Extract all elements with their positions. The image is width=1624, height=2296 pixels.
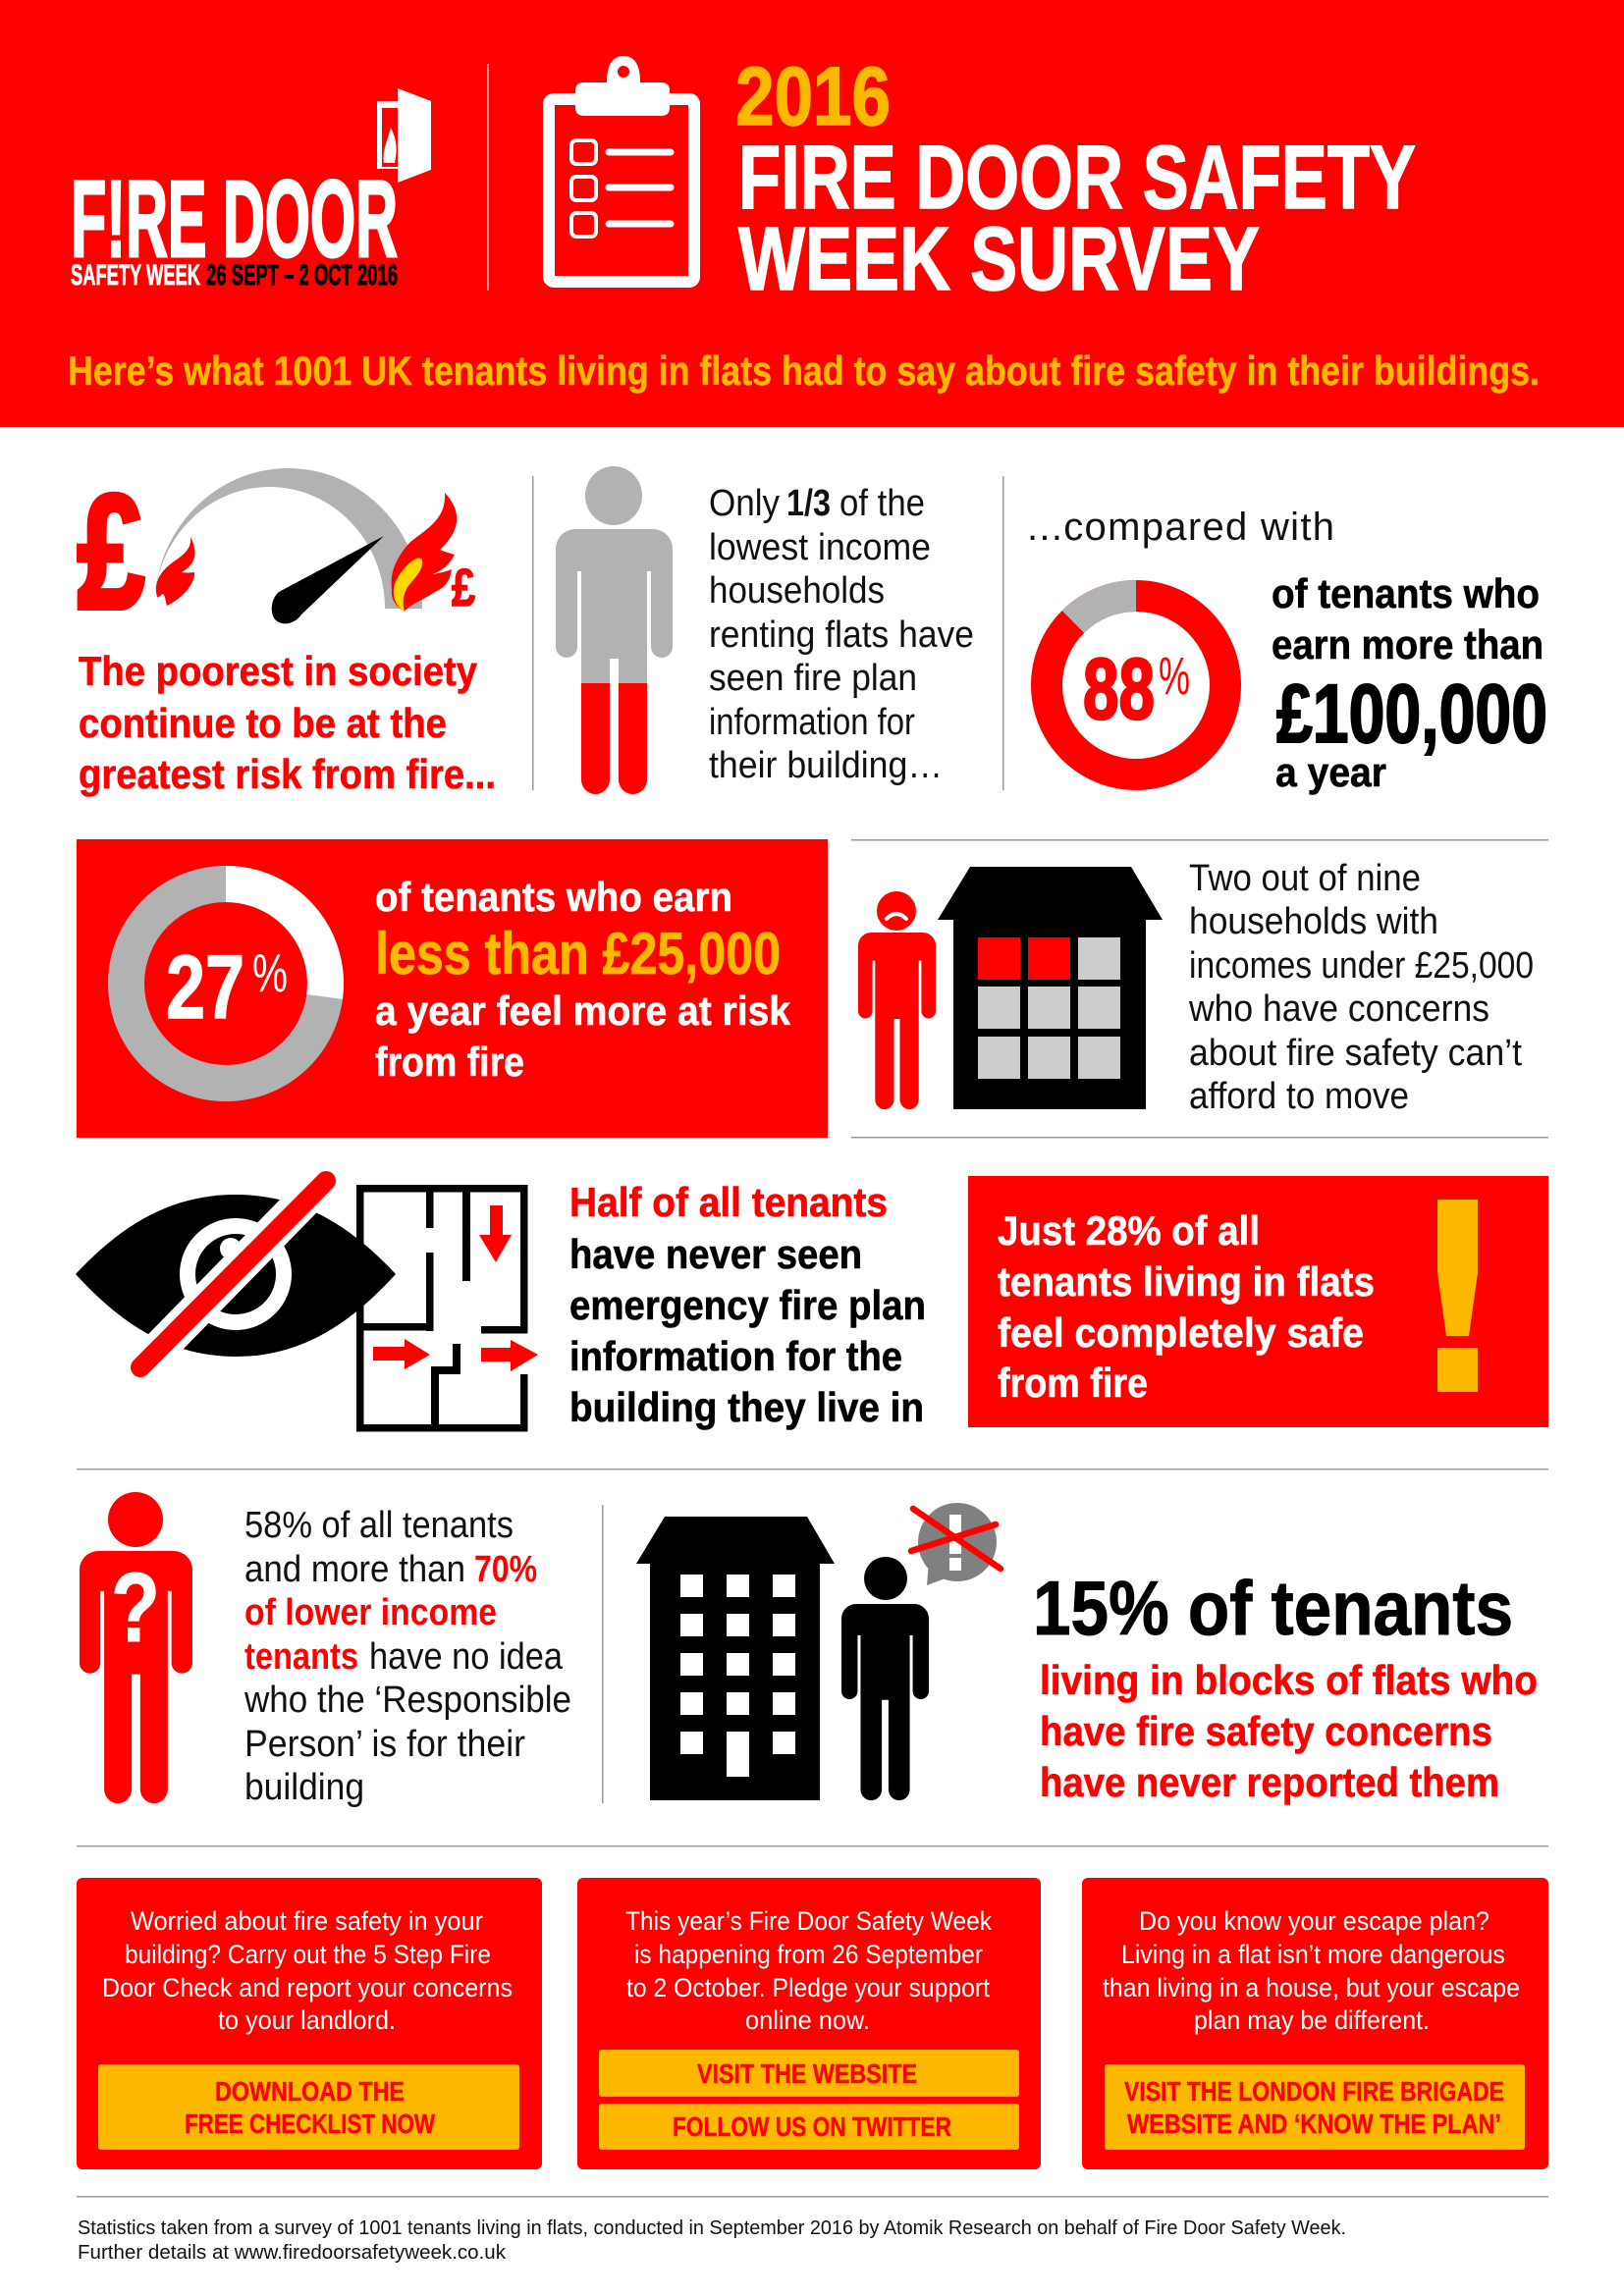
text: earners under 25,000 — [375, 874, 791, 1085]
footer: source note: Further details at www.firedoorsafetyweek.co.uk — [78, 2242, 507, 2264]
icon: fire door — [377, 88, 431, 183]
icon: crossed out eye — [76, 1181, 396, 1367]
button: London Fire Brigade: VISIT THE LONDON FIRE BRIGADE — [1124, 2076, 1504, 2107]
text: blocks of flats: have fire safety concerns — [1040, 1708, 1492, 1754]
icon: gauge arc — [154, 468, 422, 609]
icon: tower block — [636, 1517, 835, 1800]
panel: 28 percent feel safe — [968, 1176, 1548, 1427]
text: earners under 25,000: less than £25,000 — [375, 921, 781, 987]
icon: apartment block with windows — [938, 867, 1163, 1109]
text: one third of households: information for — [709, 702, 915, 743]
text: one third of households: seen fire plan — [709, 658, 917, 699]
text: half of all tenants: have never seen — [569, 1231, 862, 1277]
icon: gauge needle — [272, 536, 384, 623]
text: this year's week: to 2 October. Pledge your support — [626, 1973, 990, 2002]
panel: 88 percent comparison — [1027, 506, 1547, 795]
panel: escape plan call to action — [1082, 1878, 1548, 2169]
panel: website call to action — [577, 1878, 1041, 2169]
icon: black person — [841, 1557, 929, 1800]
text: 58 percent of tenants: building — [244, 1767, 364, 1808]
text: just 28 percent: tenants living in flats — [998, 1258, 1375, 1305]
text: 58 percent of tenants — [244, 1505, 571, 1808]
text: 58 percent of tenants: Person’ is for their — [244, 1724, 525, 1765]
button: visit the website — [599, 2050, 1019, 2097]
text: one third of households: 1/3 — [786, 483, 831, 524]
text: worried about fire safety: Worried about fire safety in your — [131, 1906, 483, 1936]
text: just 28 percent: from fire — [998, 1360, 1148, 1406]
text: two out of nine — [1188, 858, 1534, 1117]
text: 58 percent of tenants: of lower income — [244, 1592, 497, 1633]
text: this year's week: online now. — [745, 2005, 870, 2035]
button: visit the website: VISIT THE WEBSITE — [697, 2058, 917, 2089]
footer: source note: Statistics taken from a survey of 1001 tenants living in flats, conducted in September 2016 by Atomik Research on behalf of Fire Door Safety Week. — [78, 2217, 1346, 2239]
icon: person one third filled — [556, 466, 673, 794]
text: 58 percent of tenants: tenants — [244, 1636, 358, 1678]
text: this year's week: This year’s Fire Door Safety Week — [625, 1906, 992, 1936]
heading: poorest at risk: continue to be at the — [79, 700, 447, 746]
text: half of all tenants — [569, 1179, 926, 1430]
logo strapline: SAFETY WEEK — [71, 259, 200, 292]
panel: 27 percent feel at risk — [77, 839, 828, 1138]
text: blocks of flats: living in blocks of flats who — [1040, 1657, 1538, 1703]
text: blocks of flats: have never reported them — [1040, 1759, 1499, 1805]
icon: small pound sign: £ — [452, 559, 475, 617]
text: earners under 25,000: a year feel more at risk — [375, 988, 791, 1034]
icon: crossed out speech bubble — [911, 1503, 1001, 1585]
panel: risk gauge — [78, 461, 496, 797]
text: half of all tenants: building they live in — [569, 1384, 924, 1430]
button: download checklist: FREE CHECKLIST NOW — [185, 2109, 435, 2139]
button: follow on twitter — [599, 2104, 1019, 2150]
icon: person with question mark: ? — [111, 1553, 160, 1663]
text: one third of households: households — [709, 570, 885, 612]
chart: 27 percent donut: 27 — [166, 937, 244, 1038]
chart: 88 percent donut — [1047, 596, 1225, 774]
chart: 88 percent donut: 88 — [1083, 640, 1155, 737]
text: blocks of flats — [1040, 1657, 1538, 1805]
logo: Fire Door Safety Week — [71, 88, 431, 292]
text: compared with: ...compared with — [1027, 506, 1334, 549]
text: this year's week — [625, 1906, 992, 2035]
text: two out of nine: Two out of nine — [1189, 858, 1421, 899]
panel: unreported concerns — [636, 1503, 1538, 1805]
chart: 88 percent donut: % — [1159, 647, 1190, 706]
heading: poorest at risk: greatest risk from fire... — [79, 751, 496, 797]
title: 2016 — [735, 50, 891, 142]
button: download checklist: DOWNLOAD THE — [215, 2076, 405, 2107]
text: earners under 25,000: of tenants who earn — [375, 874, 732, 920]
text: one third of households: of the — [839, 483, 925, 524]
panel: responsible person — [80, 1492, 571, 1808]
text: escape plan — [1103, 1906, 1520, 2035]
icon: exclamation mark — [1437, 1200, 1478, 1392]
text: 58 percent of tenants: who the ‘Responsible — [244, 1680, 571, 1721]
icon: sad person — [858, 891, 936, 1109]
logo wordmark: F!RE DOOR — [71, 159, 398, 280]
title: FIRE DOOR SAFETY — [738, 128, 1416, 228]
text: two out of nine: households with — [1189, 901, 1438, 942]
text: earners over 100,000: earn more than — [1272, 621, 1543, 667]
panel: checklist call to action — [77, 1878, 542, 2169]
text: two out of nine: afford to move — [1189, 1076, 1409, 1117]
text: 58 percent of tenants: 70% — [474, 1549, 537, 1590]
panel: can't afford to move — [851, 839, 1548, 1139]
text: half of all tenants: Half of all tenants — [569, 1179, 888, 1225]
panel: one third statistic — [556, 466, 974, 794]
panel: header banner — [0, 0, 1624, 427]
title — [735, 50, 1416, 309]
heading: poorest at risk — [79, 648, 496, 797]
logo dates: 26 SEPT – 2 OCT 2016 — [206, 259, 398, 292]
text: worried about fire safety — [102, 1906, 513, 2035]
text: one third of households: renting flats have — [709, 614, 974, 656]
text: two out of nine: about fire safety can’t — [1189, 1033, 1522, 1074]
button: download checklist — [98, 2064, 519, 2150]
title: WEEK SURVEY — [738, 209, 1260, 309]
text: escape plan: than living in a house, but your escape — [1103, 1973, 1520, 2002]
text: worried about fire safety: to your landlord. — [218, 2005, 396, 2035]
text: one third of households: their building… — [709, 745, 943, 786]
text: earners over 100,000: £100,000 — [1276, 667, 1547, 760]
text: escape plan: plan may be different. — [1194, 2005, 1430, 2035]
footer: source note — [78, 2217, 1346, 2264]
icon: floor plan with exits — [356, 1185, 538, 1431]
button: follow on twitter: FOLLOW US ON TWITTER — [673, 2111, 951, 2142]
text: two out of nine: incomes under £25,000 — [1189, 945, 1534, 987]
panel: never seen fire plan — [76, 1179, 926, 1431]
text: earners over 100,000: a year — [1275, 749, 1386, 795]
chart: 27 percent donut — [126, 883, 326, 1084]
heading: poorest at risk: The poorest in society — [79, 648, 478, 694]
icon: person with question mark — [80, 1492, 192, 1803]
text: two out of nine: who have concerns — [1188, 988, 1489, 1030]
button: London Fire Brigade — [1105, 2064, 1525, 2150]
text: escape plan: Living in a flat isn’t more dangerous — [1121, 1940, 1505, 1969]
text: 58 percent of tenants: have no idea — [369, 1636, 564, 1678]
text: one third of households: lowest income — [709, 527, 931, 568]
icon: large pound sign: £ — [78, 461, 144, 642]
icon: clipboard checklist — [549, 56, 694, 282]
text: half of all tenants: emergency fire plan — [569, 1282, 926, 1328]
text: this year's week: is happening from 26 September — [634, 1940, 983, 1969]
text: worried about fire safety: building? Carry out the 5 Step Fire — [125, 1940, 491, 1969]
text: one third of households — [709, 483, 974, 786]
text: just 28 percent — [998, 1207, 1375, 1406]
text: just 28 percent: feel completely safe — [998, 1309, 1364, 1356]
text: escape plan: Do you know your escape plan? — [1139, 1906, 1489, 1936]
text: one third of households: Only — [709, 483, 780, 524]
text: earners under 25,000: from fire — [375, 1039, 524, 1085]
text: 58 percent of tenants: 58% of all tenants — [244, 1505, 514, 1546]
text: earners over 100,000 — [1272, 570, 1547, 795]
text: earners over 100,000: of tenants who — [1272, 570, 1540, 616]
text: just 28 percent: Just 28% of all — [998, 1207, 1260, 1254]
chart: 27 percent donut: % — [252, 942, 288, 1003]
icon: large flame — [392, 493, 457, 612]
icon: small flame — [156, 537, 195, 606]
heading: 15 percent of tenants: 15% of tenants — [1033, 1565, 1513, 1651]
text: 58 percent of tenants: and more than — [244, 1549, 465, 1590]
button: London Fire Brigade: WEBSITE AND ‘KNOW THE PLAN’ — [1127, 2109, 1501, 2139]
text: worried about fire safety: Door Check and report your concerns — [102, 1973, 513, 2002]
text: half of all tenants: information for the — [569, 1333, 902, 1379]
